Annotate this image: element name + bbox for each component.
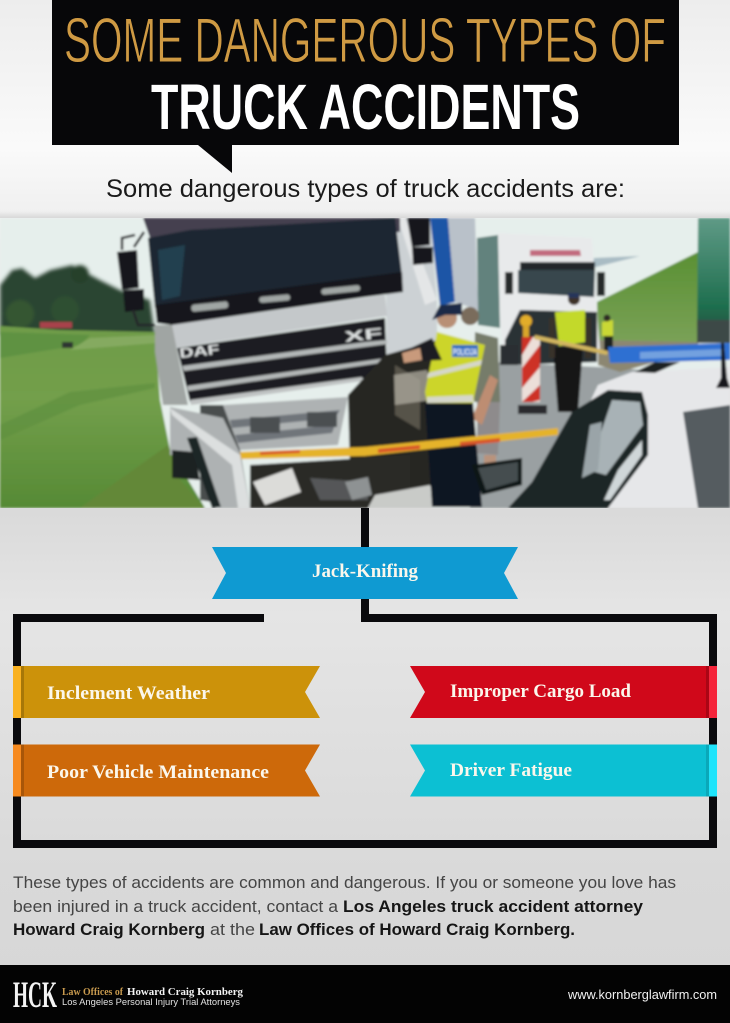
blue light bar: [608, 343, 730, 363]
ribbon: Poor Vehicle Maintenance: Poor Vehicle Maintenance: [47, 762, 269, 783]
crashed DAF truck cab: [117, 218, 478, 508]
lead police officer: POLICIJA: [453, 347, 477, 358]
footer bar: [0, 965, 730, 1023]
logo mark: HCK: [13, 975, 57, 1016]
side mirrors: [117, 232, 155, 325]
closing paragraph: been injured in a truck accident, contact a: [13, 897, 339, 916]
connector line from photo: [361, 508, 369, 622]
ribbon: Driver Fatigue: [410, 744, 717, 796]
lead police officer: [402, 303, 485, 507]
firm tagline: Los Angeles Personal Injury Trial Attorneys: [62, 997, 240, 1008]
ribbon: Improper Cargo Load: Improper Cargo Load: [450, 681, 631, 702]
third officer: [602, 314, 613, 352]
closing paragraph: Los Angeles truck accident attorney: [343, 897, 644, 916]
green trailer: [697, 218, 730, 343]
car wing mirror: [472, 458, 522, 495]
closing paragraph: [13, 873, 676, 939]
right distant scene: hill: [597, 252, 698, 345]
ribbon: Jack-Knifing: [212, 547, 518, 599]
photo: crashed truck with police at scene: [0, 218, 730, 508]
ribbon: Driver Fatigue: Driver Fatigue: [450, 760, 572, 781]
barrier and warning lamp: [518, 315, 608, 414]
grass field: [0, 326, 205, 508]
second truck: [477, 233, 605, 365]
DAF logo: DAF: [179, 341, 221, 361]
road: [469, 362, 639, 508]
lower damaged front: [348, 340, 440, 490]
closing paragraph: These types of accidents are common and dangerous. If you or someone you love has: [13, 873, 676, 892]
closing paragraph: Howard Craig Kornberg: [13, 920, 205, 939]
flowchart frame: [17, 618, 713, 844]
second officer: [549, 293, 591, 412]
tree line: [0, 265, 155, 335]
closing paragraph: Law Offices of Howard Craig Kornberg.: [259, 920, 575, 939]
header banner: [52, 0, 679, 173]
subheading: Some dangerous types of truck accidents are:: [106, 175, 625, 203]
ribbon: Inclement Weather: Inclement Weather: [47, 683, 211, 704]
man in grey shirt: [460, 306, 501, 464]
ribbon: Jack-Knifing: Jack-Knifing: [312, 561, 418, 582]
ribbon: Improper Cargo Load: [410, 666, 717, 718]
XF badge: XF: [344, 325, 383, 346]
firm name: Law Offices of: [62, 987, 123, 998]
closing paragraph: at the: [210, 920, 255, 939]
footer bar: Howard Craig Kornberg: [127, 987, 244, 998]
police car: [472, 342, 730, 508]
caution tape: [240, 428, 558, 459]
ribbon: Poor Vehicle Maintenance: [13, 744, 320, 796]
ribbon: Inclement Weather: [13, 666, 320, 718]
website: www.kornberglawfirm.com: [567, 987, 717, 1002]
antenna: [716, 342, 730, 388]
